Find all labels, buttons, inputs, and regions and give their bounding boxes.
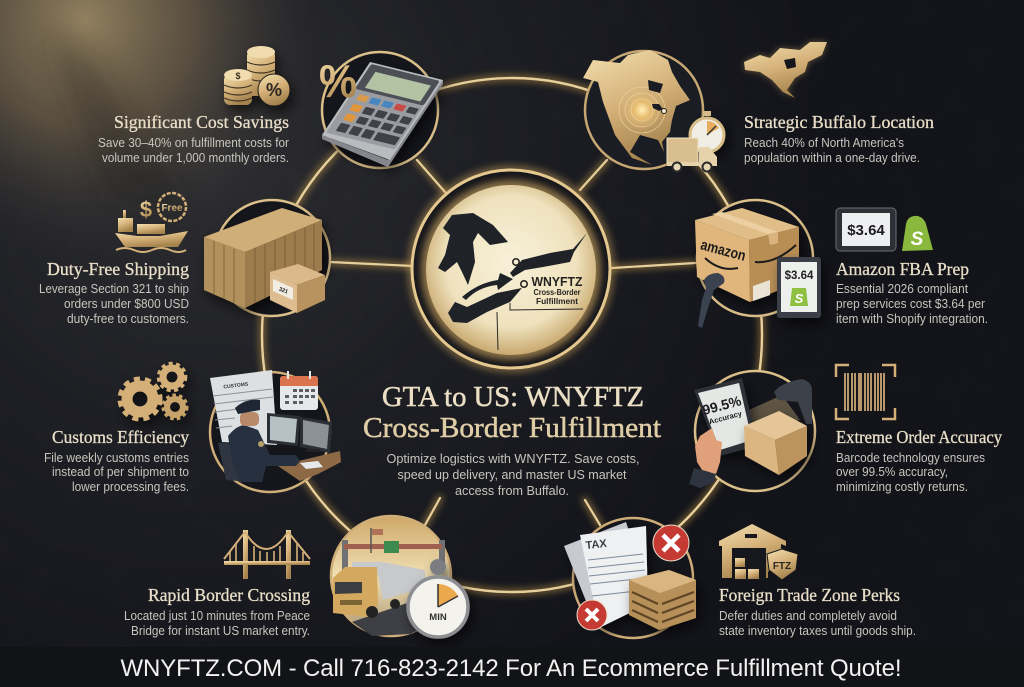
text: significant cost savings bbox=[98, 112, 289, 165]
text: significant cost savings: volume under 1,000 monthly orders. bbox=[102, 151, 289, 165]
icon: price display and shopify bag bbox=[836, 208, 933, 251]
text: strategic buffalo location bbox=[744, 112, 934, 165]
icon: warehouse and FTZ shield: FTZ bbox=[773, 561, 791, 572]
node: border crossing bbox=[331, 516, 468, 637]
stopwatch bbox=[690, 111, 724, 152]
icon: cargo ship: $ bbox=[140, 197, 152, 222]
calculator body bbox=[322, 62, 443, 167]
text: significant cost savings: Save 30–40% on fulfillment costs for bbox=[98, 136, 289, 150]
icon: warehouse and FTZ shield bbox=[719, 524, 798, 580]
icon: coins and percent bbox=[224, 46, 290, 106]
text: extreme order accuracy: Extreme Order Accuracy bbox=[836, 427, 1002, 447]
truck bbox=[333, 562, 425, 618]
cardboard box bbox=[744, 411, 807, 475]
text: rapid border crossing: Rapid Border Crossing bbox=[148, 585, 310, 605]
footer banner: WNYFTZ.COM - Call 716-823-2142 For An Ecommerce Fulfillment Quote! bbox=[120, 655, 902, 682]
text: strategic buffalo location: Strategic Buffalo Location bbox=[744, 112, 934, 132]
icon: north america map bbox=[744, 42, 827, 98]
icon: coins and percent: $ bbox=[235, 71, 241, 81]
text: duty-free shipping: orders under $800 USD bbox=[64, 297, 189, 311]
intro text: speed up delivery, and master US market bbox=[398, 467, 627, 482]
text: customs efficiency: Customs Efficiency bbox=[52, 427, 189, 447]
icon: gears bbox=[120, 364, 187, 419]
connecting ring and spokes bbox=[262, 78, 762, 592]
node: accuracy tablet and scanner bbox=[689, 371, 815, 491]
tablet: 99.5% bbox=[700, 392, 743, 418]
text: duty-free shipping: Duty-Free Shipping bbox=[47, 259, 189, 279]
cardboard box with label: 321 bbox=[278, 287, 289, 295]
hub label: Cross-Border bbox=[534, 287, 581, 297]
officer bbox=[218, 400, 300, 482]
barcode scanner bbox=[698, 273, 724, 328]
tablet with price: S bbox=[795, 291, 804, 306]
icon: cargo ship: Free bbox=[161, 203, 183, 214]
text: foreign trade zone perks: Foreign Trade Zone Perks bbox=[719, 585, 900, 605]
node: globe with truck and stopwatch bbox=[583, 50, 724, 172]
text: strategic buffalo location: Reach 40% of North America's bbox=[744, 136, 904, 150]
delivery truck bbox=[667, 138, 717, 172]
icon: cargo ship bbox=[115, 193, 188, 252]
text: amazon fba prep: Essential 2026 compliant bbox=[836, 282, 968, 296]
text: foreign trade zone perks bbox=[719, 585, 916, 638]
text: amazon fba prep: prep services cost $3.64 per bbox=[836, 297, 985, 311]
intro text: Optimize logistics with WNYFTZ. Save costs, bbox=[386, 451, 640, 466]
tablet: Accuracy bbox=[708, 409, 744, 426]
text: rapid border crossing: Located just 10 minutes from Peace bbox=[124, 609, 310, 623]
text: rapid border crossing: Bridge for instant US market entry. bbox=[131, 624, 310, 638]
tablet bbox=[694, 378, 758, 456]
icon: price display and shopify bag: $3.64 bbox=[847, 222, 885, 239]
text: extreme order accuracy: minimizing costly returns. bbox=[836, 480, 968, 494]
text: duty-free shipping: duty-free to customers. bbox=[67, 312, 189, 326]
desk bbox=[278, 451, 341, 481]
center hub: lake map and logo bbox=[407, 165, 615, 373]
monitors bbox=[267, 413, 332, 453]
text: extreme order accuracy: over 99.5% accuracy, bbox=[836, 465, 948, 479]
tablet with price bbox=[777, 257, 821, 318]
node: tax documents bbox=[564, 518, 696, 638]
tablet with price: $3.64 bbox=[785, 270, 814, 282]
node: customs officer bbox=[210, 370, 341, 492]
icon: bridge bbox=[224, 530, 310, 579]
text: customs efficiency: File weekly customs entries bbox=[44, 451, 189, 465]
title: GTA to US: WNYFTZ bbox=[382, 382, 644, 413]
pins and leader lines bbox=[497, 259, 583, 350]
declaration form: CUSTOMS bbox=[223, 381, 249, 391]
text: amazon fba prep: item with Shopify integration. bbox=[836, 312, 988, 326]
footer banner bbox=[0, 647, 1024, 687]
icon: price display and shopify bag: S bbox=[911, 229, 924, 250]
text: extreme order accuracy bbox=[836, 427, 1002, 494]
text: foreign trade zone perks: Defer duties and completely avoid bbox=[719, 609, 897, 623]
text: rapid border crossing bbox=[124, 585, 310, 638]
intro text bbox=[386, 451, 640, 498]
node: amazon box bbox=[695, 200, 821, 328]
node: shipping container bbox=[204, 200, 330, 316]
intro text: access from Buffalo. bbox=[455, 483, 569, 498]
tax forms: TAX bbox=[585, 538, 608, 552]
hub label bbox=[532, 275, 583, 306]
timer: MIN bbox=[429, 612, 447, 623]
text: extreme order accuracy: Barcode technology ensures bbox=[836, 451, 985, 465]
icon: coins and percent: % bbox=[266, 80, 282, 100]
text: customs efficiency: instead of per shipment to bbox=[52, 465, 189, 479]
text: customs efficiency: lower processing fees. bbox=[72, 480, 189, 494]
text: customs efficiency bbox=[44, 427, 189, 494]
hub label: WNYFTZ bbox=[532, 275, 583, 289]
icon: barcode bbox=[836, 365, 895, 419]
radius rings bbox=[619, 80, 666, 133]
percent sign: % bbox=[319, 55, 357, 107]
red x marks bbox=[577, 525, 689, 630]
route arrow bbox=[462, 273, 513, 300]
pallets bbox=[629, 570, 696, 630]
text: duty-free shipping: Leverage Section 321 to ship bbox=[39, 282, 189, 296]
text: duty-free shipping bbox=[39, 259, 189, 326]
title: Cross-Border Fulfillment bbox=[363, 413, 661, 444]
node: calculator bbox=[319, 52, 443, 168]
text: strategic buffalo location: population within a one-day drive. bbox=[744, 151, 920, 165]
lake silhouettes bbox=[438, 213, 587, 323]
text: significant cost savings: Significant Cost Savings bbox=[114, 112, 289, 132]
scanner bbox=[774, 379, 812, 424]
hand bbox=[695, 428, 722, 474]
north america bbox=[583, 50, 690, 165]
node: amazon box: amazon bbox=[699, 236, 748, 265]
title bbox=[363, 382, 661, 444]
gate bbox=[342, 528, 445, 574]
text: amazon fba prep: Amazon FBA Prep bbox=[836, 259, 969, 279]
hub label: Fulfillment bbox=[536, 296, 578, 306]
text: amazon fba prep bbox=[836, 259, 988, 326]
text: foreign trade zone perks: state inventory taxes until goods ship. bbox=[719, 624, 916, 638]
calendar bbox=[280, 371, 318, 410]
